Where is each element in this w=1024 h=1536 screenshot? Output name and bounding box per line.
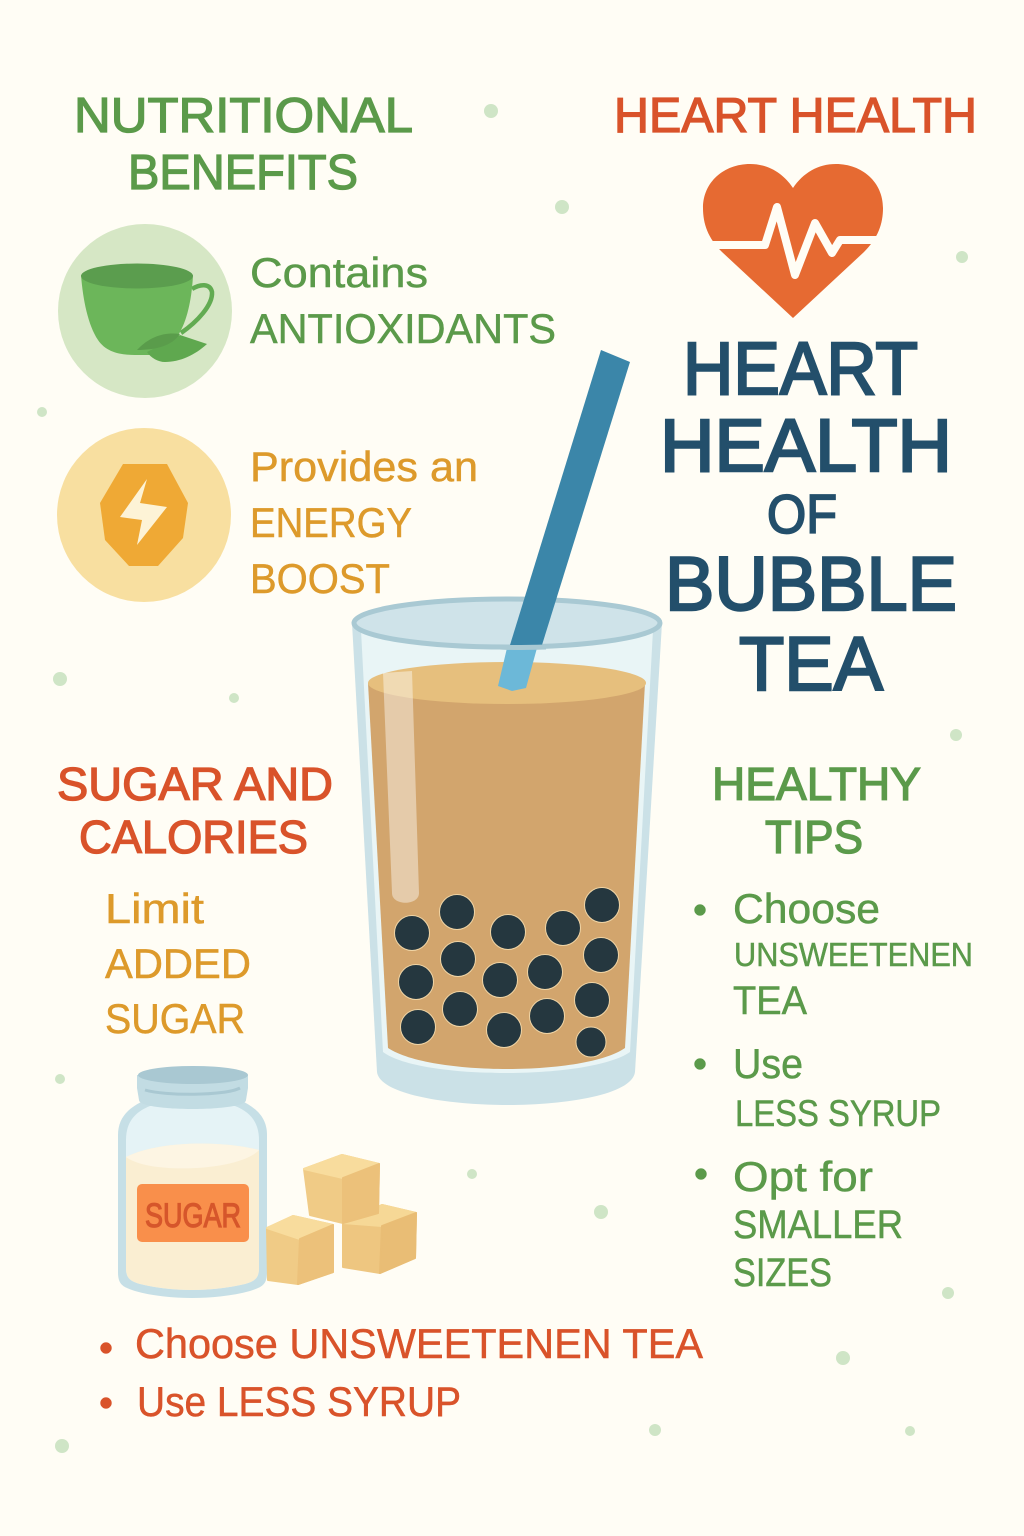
heading: nutritional benefits: NUTRITIONAL [74,89,413,143]
text: contains antioxidants [250,249,556,352]
icon: green tea cup [58,224,232,398]
heading: nutritional benefits: BENEFITS [128,146,358,200]
icon: heart with pulse [703,164,883,318]
list: sugar tips: Use LESS SYRUP [137,1378,461,1425]
list: healthy tips: Opt for [733,1153,873,1200]
heading: healthy tips [712,758,921,863]
text: limit added sugar: SUGAR [105,995,245,1042]
main title: TEA [739,622,883,707]
text: contains antioxidants: Contains [250,249,428,296]
list: sugar tips: Choose UNSWEETENEN TEA [135,1320,703,1367]
list: healthy tips [694,885,973,1295]
straw lower [498,648,537,691]
heading: sugar and calories: SUGAR AND [57,758,333,810]
heading: healthy tips: TIPS [765,811,863,863]
list: healthy tips: SIZES [733,1251,832,1295]
main title: BUBBLE [665,542,957,627]
text: contains antioxidants: ANTIOXIDANTS [250,305,556,352]
list: sugar tips [100,1320,703,1425]
text: provides an energy boost: BOOST [250,555,390,602]
illustration: bubble tea glass [352,350,662,1105]
list: healthy tips: Use [733,1040,803,1087]
text: limit added sugar: Limit [105,885,204,932]
rim [354,599,660,647]
main title: HEART [683,327,918,410]
list: healthy tips: UNSWEETENEN [734,936,973,973]
glass highlight [383,671,419,903]
list: healthy tips: LESS SYRUP [735,1093,941,1134]
heading: nutritional benefits [74,89,413,200]
tapioca pearls [394,888,620,1057]
main title [660,327,957,707]
illustration: sugar cubes [267,1155,416,1284]
text: limit added sugar: ADDED [105,940,251,987]
main title: OF [767,483,837,545]
list: healthy tips: SMALLER [733,1203,903,1247]
glass body [352,623,662,1105]
straw upper [510,350,630,645]
text: provides an energy boost: ENERGY [250,499,412,546]
heading: heart health: HEART HEALTH [614,89,977,143]
text: provides an energy boost [250,443,478,602]
milk tea [368,683,645,1069]
list: healthy tips: Choose [733,885,880,932]
heading: sugar and calories [57,758,333,863]
list: healthy tips: TEA [733,979,807,1023]
main title: HEALTH [660,404,952,487]
jar label [137,1184,249,1242]
text: limit added sugar [105,885,251,1042]
heading: healthy tips: HEALTHY [712,758,921,810]
heading: sugar and calories: CALORIES [79,811,308,863]
illustration: sugar jar [118,1066,267,1298]
illustration: sugar jar: SUGAR [145,1197,241,1235]
text: provides an energy boost: Provides an [250,443,478,490]
icon: energy bolt [57,428,231,602]
